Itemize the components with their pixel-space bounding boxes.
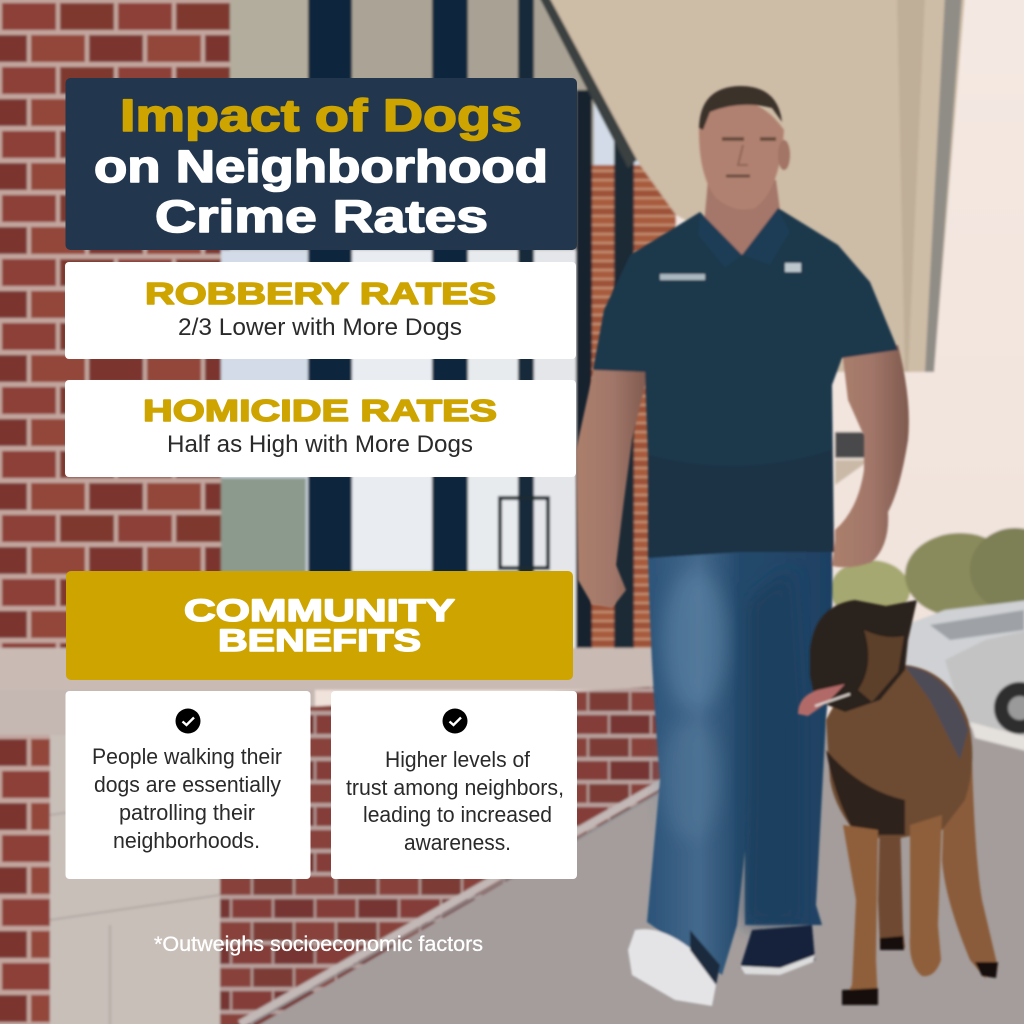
awning soffit — [540, 0, 965, 372]
panel: homicide rates — [65, 380, 576, 477]
panel: benefit one — [66, 691, 310, 879]
panel: community benefits heading: BENEFITS — [218, 622, 421, 658]
text: benefit two description: trust among neighbors, — [346, 775, 564, 800]
heading: homicide rates: HOMICIDE RATES — [143, 393, 497, 428]
german shepherd dog — [798, 600, 998, 1005]
icon: check badge — [176, 708, 200, 734]
near legs — [842, 825, 878, 1003]
polo shirt — [593, 208, 898, 558]
head — [699, 99, 784, 210]
parked cars — [905, 600, 1024, 745]
shoes — [628, 929, 716, 1006]
panel: community benefits heading — [66, 571, 573, 680]
title line: Impact of Dogs: Impact of Dogs — [120, 90, 522, 141]
icon: check badge — [442, 708, 468, 734]
dog walker: man in navy polo and jeans — [576, 86, 909, 1006]
text: benefit two description — [346, 747, 564, 855]
text: benefit one description: neighborhoods. — [113, 828, 260, 853]
brick column left — [0, 0, 221, 660]
title line: Crime Rates: Crime Rates — [155, 191, 488, 242]
distant support beam — [835, 432, 878, 458]
concrete sill — [0, 648, 665, 690]
trees in the distance — [830, 528, 1024, 620]
tongue — [798, 684, 845, 716]
window wall — [220, 0, 640, 685]
text: benefit two description: leading to increased — [363, 802, 552, 827]
text: benefit one description: People walking their — [92, 744, 282, 769]
text: homicide stat: Half as High with More Dogs — [167, 431, 473, 458]
title line: on Neighborhood: on Neighborhood — [94, 141, 548, 192]
body — [826, 665, 972, 838]
far legs — [878, 810, 905, 950]
title panel — [66, 78, 577, 250]
panel: robbery rates — [65, 262, 576, 359]
text: benefit two description: Higher levels of — [385, 747, 531, 772]
text: robbery stat: 2/3 Lower with More Dogs — [178, 314, 462, 341]
panel: benefit two — [331, 691, 577, 879]
heading: robbery rates: ROBBERY RATES — [145, 276, 496, 311]
sidewalk — [240, 715, 1024, 1024]
text: benefit two description: awareness. — [404, 830, 511, 855]
arms — [576, 368, 648, 608]
panel: community benefits heading: COMMUNITY — [184, 592, 455, 628]
head — [810, 600, 917, 712]
jeans — [647, 545, 832, 975]
door handle — [500, 498, 548, 568]
lower brick wall — [220, 686, 664, 1024]
orange brick pier — [592, 165, 614, 655]
text: benefit one description: patrolling their — [119, 800, 255, 825]
text: benefit one description — [92, 744, 282, 853]
neck — [704, 180, 782, 258]
footnote: *Outweighs socioeconomic factors — [154, 933, 483, 956]
text: benefit one description: dogs are essentially — [94, 772, 281, 797]
